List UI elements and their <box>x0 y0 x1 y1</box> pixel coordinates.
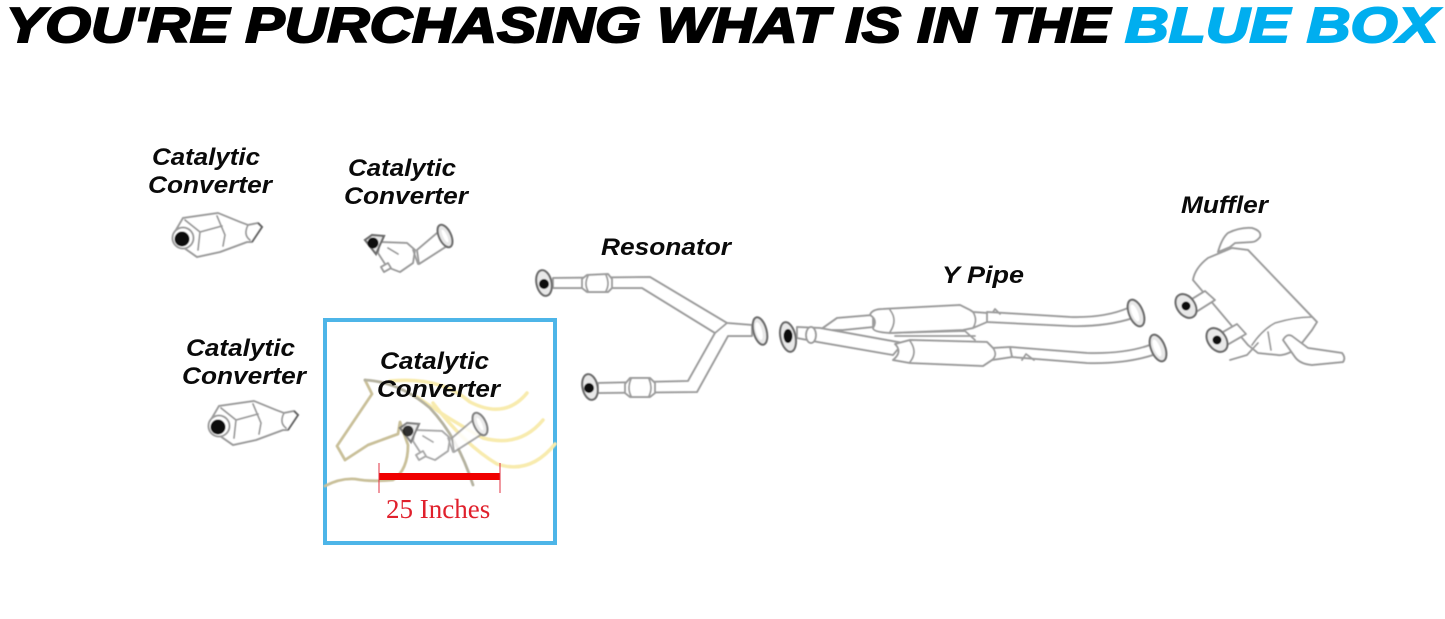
label: Catalytic <box>186 335 295 362</box>
icon: converter <box>208 401 298 445</box>
label: Resonator <box>601 234 733 261</box>
icon: muffler <box>1171 228 1344 365</box>
icon: resonator Y pipe <box>534 269 770 401</box>
label: Converter <box>377 376 502 403</box>
blue box frame <box>325 320 555 543</box>
label: Catalytic <box>380 348 489 375</box>
resonator <box>534 234 770 401</box>
label: Converter <box>182 363 308 390</box>
title highlight: blue box: BLUE BOX <box>1125 0 1442 53</box>
icon: y pipe with two mufflers <box>778 297 1170 366</box>
label: Y Pipe <box>942 262 1024 289</box>
watermark: horse outline <box>325 380 473 486</box>
y pipe <box>778 262 1170 366</box>
catalytic converter option 3 <box>182 335 308 445</box>
catalytic converter option 1 <box>148 144 274 257</box>
icon: purchased converter <box>400 411 491 460</box>
catalytic converter option 2 <box>344 155 470 272</box>
title <box>6 0 1442 53</box>
watermark: horse mane swooshes <box>390 380 555 467</box>
label: Catalytic <box>348 155 456 182</box>
icon: converter <box>172 213 262 257</box>
label: Catalytic <box>152 144 260 171</box>
icon: converter with pipe <box>365 223 456 272</box>
muffler <box>1171 192 1344 365</box>
label: Converter <box>344 183 470 210</box>
measurement label: 25 Inches <box>386 494 490 524</box>
title: YOU'RE PURCHASING WHAT IS IN THE <box>6 0 1112 53</box>
measurement bar <box>378 463 500 493</box>
label: Muffler <box>1181 192 1270 219</box>
panel: blue box with purchased part <box>325 320 555 543</box>
label: Converter <box>148 172 274 199</box>
